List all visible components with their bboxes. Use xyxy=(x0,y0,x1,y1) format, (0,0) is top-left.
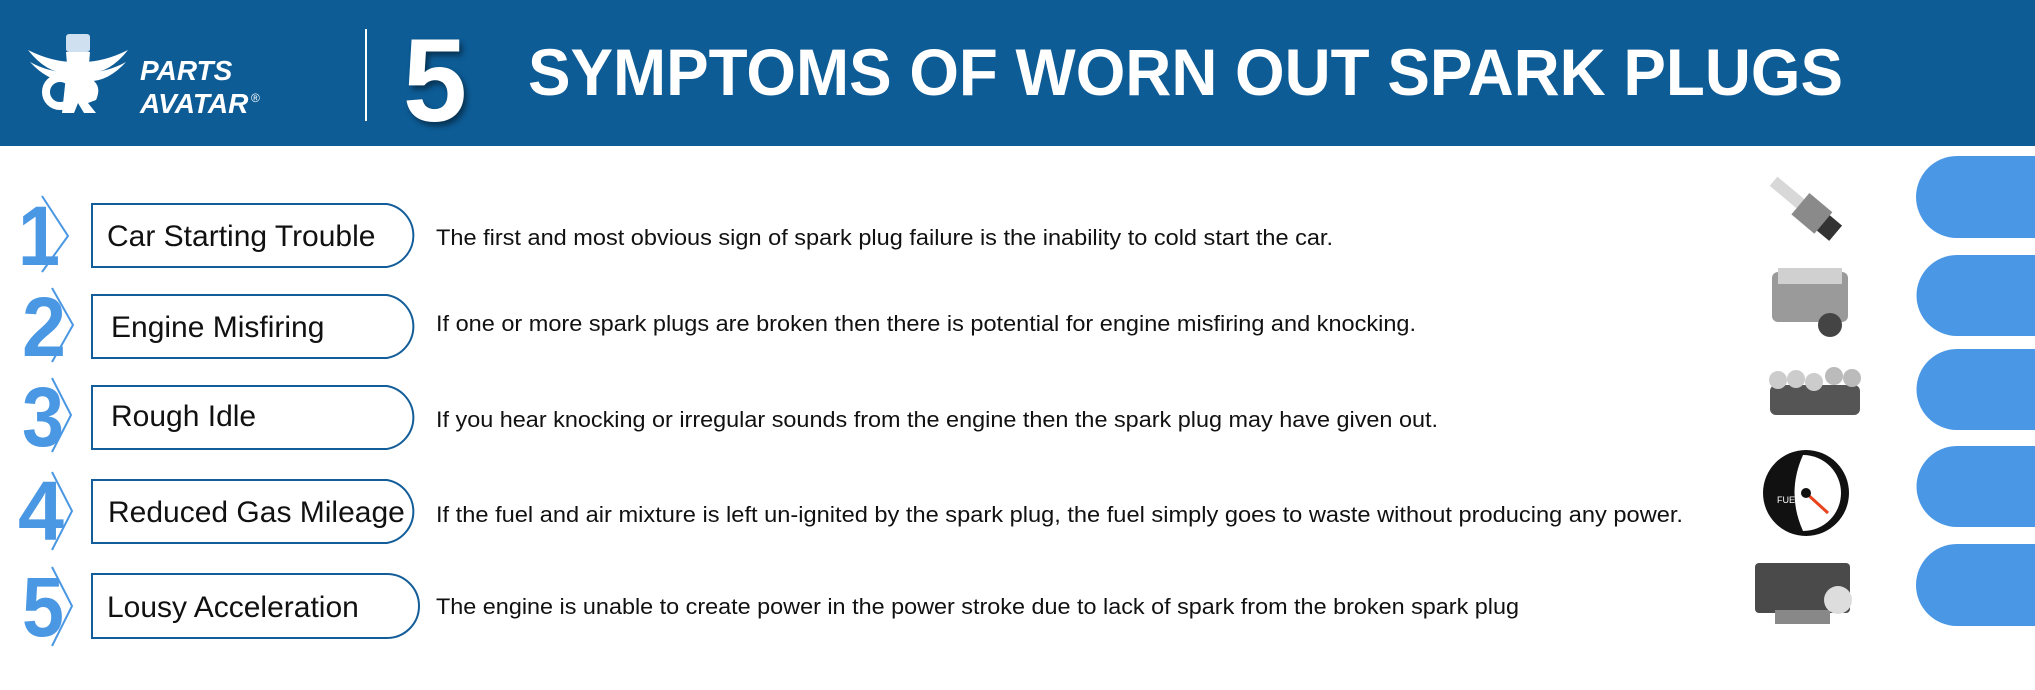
logo xyxy=(28,34,260,119)
row 5 xyxy=(22,560,1519,654)
row 3: Rough Idle xyxy=(111,400,256,433)
row 1 xyxy=(18,189,1333,283)
logo: ® xyxy=(251,91,260,105)
row 4: 4 xyxy=(18,464,64,558)
icon: fuel gauge xyxy=(1763,450,1849,536)
row 3: If you hear knocking or irregular sounds from the engine then the spark plug may have given out. xyxy=(436,407,1438,432)
big number 5: 5 xyxy=(403,15,467,147)
icon: pistons xyxy=(1769,367,1861,415)
title: SYMPTOMS OF WORN OUT SPARK PLUGS xyxy=(528,35,1843,109)
header band xyxy=(0,0,2035,147)
row 5: The engine is unable to create power in the power stroke due to lack of spark from the broken spark plug xyxy=(436,594,1519,619)
row 3: 3 xyxy=(22,370,64,464)
row 4: If the fuel and air mixture is left un-ignited by the spark plug, the fuel simply goes to waste without producing any power. xyxy=(436,502,1683,527)
icon: spark plug xyxy=(1765,170,1845,244)
row 2: If one or more spark plugs are broken then there is potential for engine misfiring and knocking. xyxy=(436,311,1416,336)
title box 1 xyxy=(92,204,413,267)
number 1: 1 xyxy=(18,189,60,283)
title box 1: Car Starting Trouble xyxy=(107,220,375,253)
logo: AVATAR xyxy=(139,88,249,119)
row 5: Lousy Acceleration xyxy=(107,591,359,624)
row 2 xyxy=(22,280,1416,374)
pills xyxy=(1916,156,2035,626)
row 2: 2 xyxy=(22,280,66,374)
icon: engine xyxy=(1772,268,1848,337)
row 3 xyxy=(22,370,1438,464)
row 4 xyxy=(18,464,1683,558)
row 4: Reduced Gas Mileage xyxy=(108,496,405,529)
icon: fuel gauge: FUEL xyxy=(1777,495,1800,505)
row 2: Engine Misfiring xyxy=(111,311,324,344)
description 1: The first and most obvious sign of spark plug failure is the inability to cold start the car. xyxy=(436,225,1333,250)
logo: PARTS xyxy=(140,55,233,86)
row 5: 5 xyxy=(22,560,64,654)
icon: truck engine xyxy=(1755,563,1852,624)
